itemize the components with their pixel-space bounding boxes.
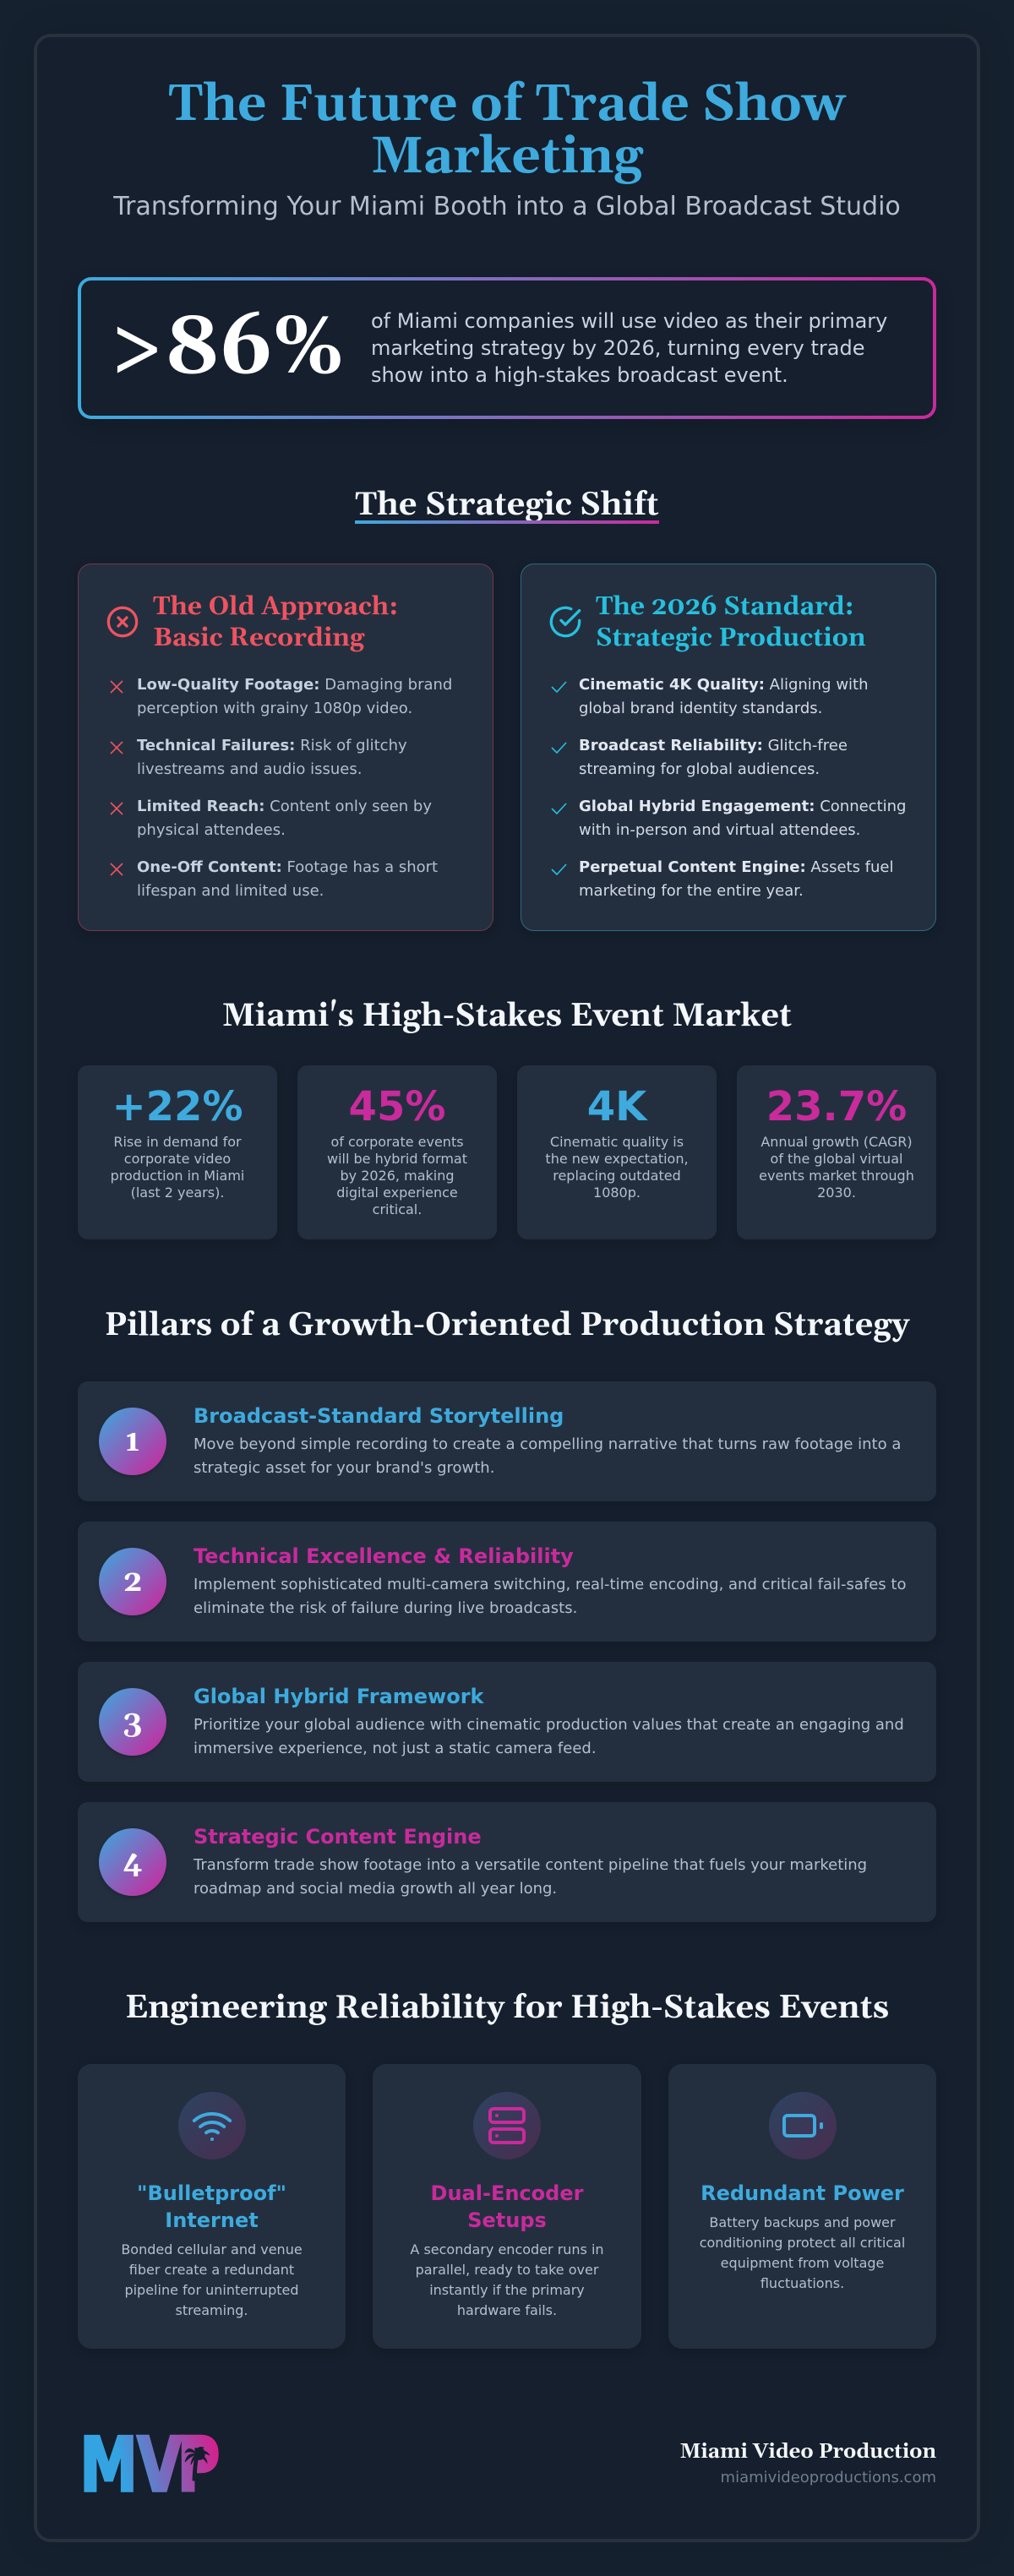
hero text	[371, 309, 887, 387]
footer website: miamivideoproductions.com	[721, 2469, 936, 2486]
card text: Battery backups and power	[709, 2214, 896, 2230]
item: Global Hybrid Engagement: Connecting	[579, 798, 906, 815]
heading: the strategic shift: The Strategic Shift	[355, 485, 659, 526]
card title: "Bulletproof"	[137, 2181, 286, 2205]
heading: pillars: Pillars of a Growth-Oriented Production Strategy	[105, 1305, 909, 1346]
item	[137, 737, 407, 778]
title: Marketing	[371, 125, 643, 190]
item	[579, 798, 906, 839]
card text: equipment from voltage	[721, 2255, 884, 2271]
stat description: will be hybrid format	[327, 1151, 467, 1167]
hero number: >86%	[108, 297, 344, 400]
old approach heading: The Old Approach:	[153, 591, 398, 624]
title: The Future of Trade Show	[168, 73, 846, 138]
card title: Redundant Power	[701, 2181, 904, 2205]
stat value: +22%	[112, 1083, 243, 1130]
pillar text: Implement sophisticated multi-camera switching, real-time encoding, and critical fail-safes to	[194, 1576, 906, 1593]
standard heading: Strategic Production	[596, 623, 866, 655]
icon: x circle	[106, 607, 139, 637]
hero text: marketing strategy by 2026, turning every trade	[371, 336, 864, 360]
pillar text	[194, 1576, 906, 1617]
pillar title: Strategic Content Engine	[194, 1825, 482, 1849]
item: streaming for global audiences.	[579, 760, 820, 778]
x mark	[110, 680, 123, 694]
card text: instantly if the primary	[429, 2282, 585, 2298]
pillar text: Move beyond simple recording to create a compelling narrative that turns raw footage into a	[194, 1435, 901, 1453]
item	[579, 676, 869, 717]
item	[137, 858, 438, 900]
item: perception with grainy 1080p video.	[137, 700, 412, 717]
card text: conditioning protect all critical	[700, 2235, 905, 2251]
stat description: replacing outdated	[553, 1168, 681, 1184]
item	[137, 798, 432, 839]
pillar text: eliminate the risk of failure during live broadcasts.	[194, 1599, 577, 1617]
number badge	[99, 1408, 166, 1475]
card text	[410, 2241, 604, 2318]
card text: pipeline for uninterrupted	[124, 2282, 299, 2298]
reliability card: power	[668, 2064, 936, 2349]
stat description: of the global virtual	[771, 1151, 902, 1167]
item: global brand identity standards.	[579, 700, 822, 717]
stat value: 23.7%	[766, 1083, 907, 1130]
card text: hardware fails.	[457, 2302, 557, 2318]
item: with in-person and virtual attendees.	[579, 821, 860, 839]
icon: wifi	[177, 2092, 245, 2159]
x mark	[110, 802, 123, 815]
stat description: the new expectation,	[545, 1151, 689, 1167]
number badge	[99, 1548, 166, 1615]
pillar text: roadmap and social media growth all year long.	[194, 1880, 557, 1898]
check mark	[551, 803, 566, 814]
pillar text: Transform trade show footage into a versatile content pipeline that fuels your marketing	[194, 1856, 867, 1874]
stat description: Rise in demand for	[113, 1134, 242, 1150]
card text: A secondary encoder runs in	[410, 2241, 604, 2257]
item: Limited Reach: Content only seen by	[137, 798, 432, 815]
stat description: events market through	[759, 1168, 914, 1184]
card title: Setups	[467, 2208, 547, 2232]
card title: Dual-Encoder	[431, 2181, 583, 2205]
panel: old approach	[78, 564, 493, 931]
pillar 4	[78, 1802, 936, 1922]
standard heading: The 2026 Standard:	[596, 591, 854, 624]
stat description: corporate video	[124, 1151, 231, 1167]
pillar 2	[78, 1522, 936, 1642]
stat card: 4K	[517, 1065, 717, 1239]
stat description: by 2026, making	[340, 1168, 455, 1184]
stat description: production in Miami	[111, 1168, 244, 1184]
stat description: digital experience	[336, 1185, 458, 1201]
stat description: critical.	[373, 1201, 422, 1217]
card title	[137, 2181, 286, 2232]
stat description: 1080p.	[593, 1185, 641, 1201]
item	[579, 737, 848, 778]
pillar 1	[78, 1381, 936, 1501]
list: old approach	[110, 676, 452, 900]
card text: fluctuations.	[760, 2275, 844, 2291]
stat value: 45%	[349, 1083, 445, 1130]
old approach heading	[153, 591, 398, 655]
stat card: hybrid	[297, 1065, 497, 1239]
standard heading	[596, 591, 866, 655]
stat description: Cinematic quality is	[550, 1134, 684, 1150]
number badge: 4	[123, 1844, 143, 1882]
hero text: show into a high-stakes broadcast event.	[371, 363, 788, 387]
pillar title: Broadcast-Standard Storytelling	[194, 1404, 564, 1428]
hero panel inner	[81, 280, 933, 416]
palm tree	[185, 2447, 210, 2481]
number badge	[99, 1828, 166, 1896]
item: physical attendees.	[137, 821, 286, 839]
icon: server	[473, 2092, 541, 2159]
subtitle: Transforming Your Miami Booth into a Global Broadcast Studio	[113, 192, 901, 221]
item: lifespan and limited use.	[137, 882, 324, 900]
item	[579, 858, 894, 900]
number badge: 1	[125, 1424, 140, 1462]
reliability card: internet	[78, 2064, 346, 2349]
footer company name: Miami Video Production	[680, 2440, 936, 2465]
card text: fiber create a redundant	[129, 2262, 294, 2278]
stat description	[545, 1134, 689, 1201]
stat card: CAGR	[737, 1065, 936, 1239]
list: 2026 standard	[551, 676, 906, 900]
stat description: 2030.	[817, 1185, 856, 1201]
x mark	[110, 863, 123, 876]
stat description: of corporate events	[330, 1134, 464, 1150]
card title	[431, 2181, 583, 2232]
card title: Internet	[165, 2208, 259, 2232]
x mark	[110, 741, 123, 754]
icon: check circle	[549, 607, 581, 637]
card text: Bonded cellular and venue	[121, 2241, 303, 2257]
item: Low-Quality Footage: Damaging brand	[137, 676, 452, 694]
heading underline	[355, 520, 659, 524]
pillar text: strategic asset for your brand's growth.	[194, 1459, 494, 1477]
pillar text	[194, 1716, 904, 1757]
reliability card: encoder	[373, 2064, 641, 2349]
pillar text: immersive experience, not just a static camera feed.	[194, 1740, 597, 1757]
item: Broadcast Reliability: Glitch-free	[579, 737, 848, 754]
number badge: 3	[123, 1704, 142, 1742]
item: livestreams and audio issues.	[137, 760, 362, 778]
item: Cinematic 4K Quality: Aligning with	[579, 676, 869, 694]
pillar title: Technical Excellence & Reliability	[194, 1544, 574, 1568]
old approach heading: Basic Recording	[153, 623, 364, 655]
stat description: (last 2 years).	[131, 1185, 224, 1201]
check mark	[551, 863, 566, 875]
number badge: 2	[123, 1564, 142, 1602]
hero text: of Miami companies will use video as their primary	[371, 309, 887, 333]
pillar text	[193, 1856, 867, 1898]
card text: parallel, ready to take over	[416, 2262, 598, 2278]
item	[137, 676, 452, 717]
card text: streaming.	[176, 2302, 248, 2318]
item: marketing for the entire year.	[579, 882, 804, 900]
stat description	[327, 1134, 467, 1217]
heading: engineering reliability: Engineering Reliability for High-Stakes Events	[125, 1988, 889, 2029]
stat card: demand	[78, 1065, 277, 1239]
title	[168, 73, 847, 190]
hero statistic panel	[78, 277, 936, 419]
number badge	[99, 1688, 166, 1756]
stat description	[759, 1134, 914, 1201]
icon: battery	[769, 2092, 837, 2159]
pillar text: Prioritize your global audience with cinematic production values that create an engaging and	[194, 1716, 904, 1734]
card text	[121, 2241, 303, 2318]
pillar title: Global Hybrid Framework	[194, 1685, 484, 1708]
panel: 2026 standard	[521, 564, 936, 931]
check mark	[551, 681, 566, 693]
stat description: Annual growth (CAGR)	[760, 1134, 913, 1150]
pillar 3	[78, 1662, 936, 1782]
stat value: 4K	[587, 1083, 646, 1130]
stat description	[111, 1134, 244, 1201]
card text	[700, 2214, 905, 2291]
pillar text	[194, 1435, 901, 1477]
check mark	[551, 742, 566, 754]
item: One-Off Content: Footage has a short	[137, 858, 438, 876]
item: Perpetual Content Engine: Assets fuel	[579, 858, 894, 876]
item: Technical Failures: Risk of glitchy	[137, 737, 407, 754]
heading: market: Miami's High-Stakes Event Market	[222, 996, 792, 1037]
